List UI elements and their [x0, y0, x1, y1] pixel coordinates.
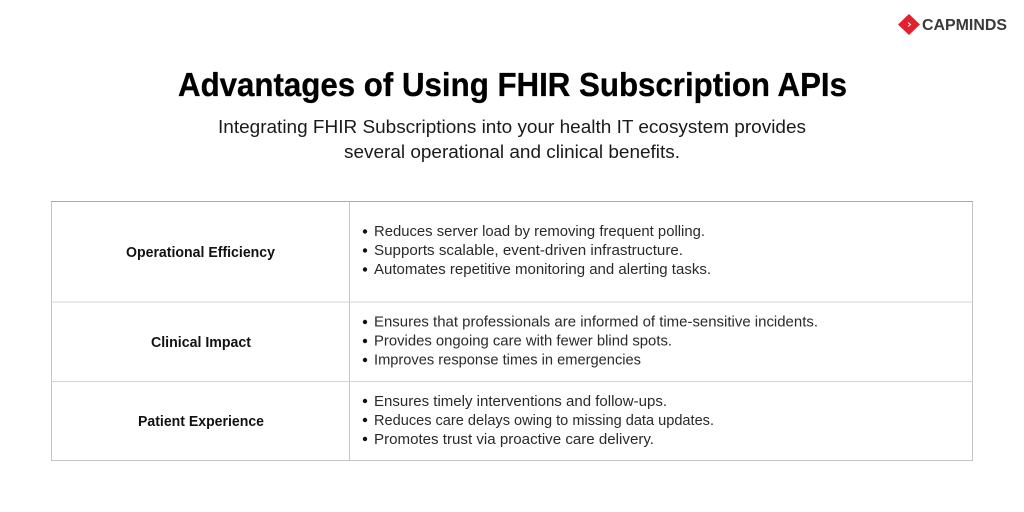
bullet list: Ensures timely interventions and follow-ups.: [374, 393, 667, 410]
bullet list: [363, 314, 818, 368]
row: Operational Efficiency: [126, 223, 711, 278]
title: Advantages of Using FHIR Subscription APIs: [178, 66, 847, 103]
bullet list: Promotes trust via proactive care delivery.: [374, 431, 654, 448]
row heading: Clinical Impact: [151, 335, 251, 351]
bullet list: Ensures that professionals are informed of time-sensitive incidents.: [374, 314, 818, 330]
logo: Capminds: [898, 14, 1007, 35]
table: [51, 201, 973, 461]
bullet list: Reduces server load by removing frequent polling.: [374, 223, 705, 240]
row: Patient Experience: [138, 393, 714, 448]
subtitle: several operational and clinical benefits.: [344, 141, 680, 162]
subtitle: [218, 116, 806, 162]
bullet list: Supports scalable, event-driven infrastructure.: [374, 242, 683, 259]
subtitle: Integrating FHIR Subscriptions into your health IT ecosystem provides: [218, 116, 806, 137]
row heading: Patient Experience: [138, 414, 264, 430]
bullet list: [363, 223, 711, 278]
logo wordmark: CAPMINDS: [922, 17, 1007, 34]
bullet list: Provides ongoing care with fewer blind spots.: [374, 332, 672, 350]
row heading: Operational Efficiency: [126, 245, 275, 261]
bullet list: Improves response times in emergencies: [374, 352, 641, 368]
bullet list: Reduces care delays owing to missing data updates.: [374, 412, 714, 429]
bullet list: Automates repetitive monitoring and alerting tasks.: [374, 261, 711, 278]
icon: red diamond: [898, 14, 920, 35]
bullet list: [363, 393, 714, 448]
row: Clinical Impact: [151, 314, 818, 368]
